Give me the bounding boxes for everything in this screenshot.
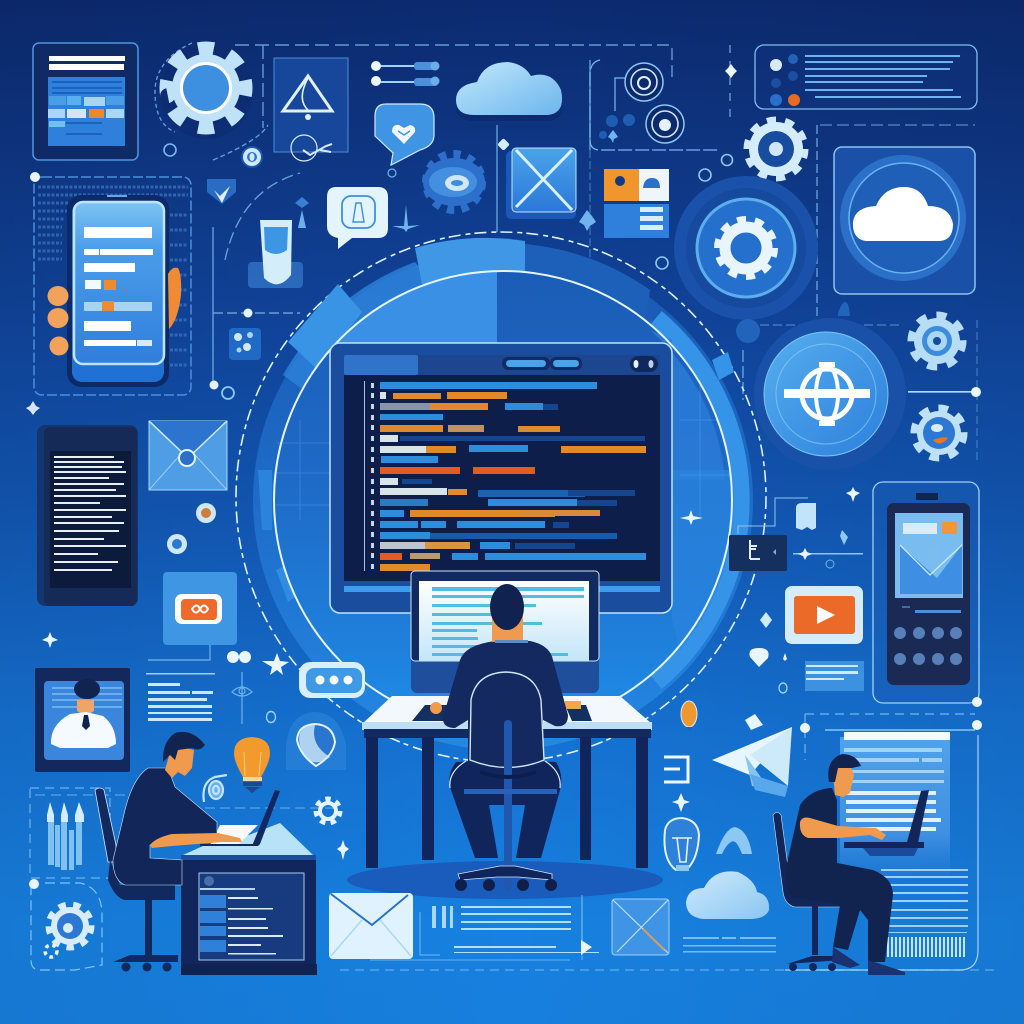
panel: dark tag box: [729, 498, 816, 571]
icon: chat bubble: [299, 662, 365, 698]
code lines: [364, 381, 646, 571]
diamond marker: [497, 138, 510, 151]
laptop right: [844, 790, 929, 856]
icon: twin dots and star: [227, 651, 289, 675]
window controls: [502, 356, 658, 372]
dashed orbit: [236, 232, 766, 762]
text block: left text lines: [146, 673, 215, 721]
desk: [362, 696, 652, 868]
person at desk, back view: [347, 571, 663, 899]
icon: coin balloon: [681, 701, 697, 731]
panel: pens chart: [30, 788, 110, 878]
text block: bottom lines with play: [420, 895, 599, 955]
icon: sliders: [371, 61, 440, 86]
icon: dotted square: [229, 328, 261, 360]
sparkles and small marks middle right: [680, 487, 863, 628]
side desk: [181, 823, 317, 975]
icon: gear in rings: [674, 176, 818, 320]
arm: [800, 818, 886, 840]
icon: outlined bulb: [664, 793, 699, 871]
outer halo: [253, 250, 753, 750]
icon: bracket glyph: [664, 757, 688, 782]
code screen: [344, 375, 660, 581]
icon: light bulb orange: [234, 737, 270, 793]
bubble disc: [736, 302, 850, 343]
icon: globe orb: [754, 318, 906, 470]
torso and arm: [113, 768, 242, 885]
patterned backing: [30, 172, 191, 395]
panel: gear card bottom left: [29, 879, 102, 970]
icon: eye and pointers: [232, 672, 276, 724]
panel: right document workspace: [773, 697, 982, 975]
icon: small rings near gear: [164, 144, 263, 168]
panel: top-left tablet: [33, 43, 138, 160]
icon: shield speech bubble: [327, 187, 388, 249]
icon: mini gear: [316, 799, 340, 823]
icon: water flask: [248, 197, 309, 288]
panel: profile portrait: [35, 668, 130, 772]
panel: twin dials: [590, 60, 718, 150]
laptop: [200, 790, 280, 846]
sparkles edges: [26, 64, 737, 860]
torso: [443, 641, 568, 765]
phone content: [84, 227, 153, 346]
icon: heart speech bubble: [375, 104, 434, 177]
panel: orange and blue layout card: [604, 169, 669, 238]
desk screen: [199, 873, 304, 960]
icon: arch shape: [716, 827, 752, 854]
radial segments: [258, 238, 741, 682]
monitor bezel: [330, 343, 672, 613]
code monitor: [330, 343, 672, 613]
panel: right phone: [873, 482, 979, 703]
panel: status list: [755, 45, 977, 109]
central radial dial: [236, 232, 766, 762]
icon: cloud lower: [686, 871, 769, 919]
frame: [785, 697, 982, 970]
icon: spiral mark: [203, 775, 227, 802]
icon: shield heart: [207, 179, 236, 204]
head side: [163, 732, 205, 778]
phone body: [67, 195, 169, 387]
inner disc: [274, 271, 734, 729]
barcode: [887, 937, 966, 957]
chair: [450, 672, 560, 891]
solid ring: [274, 271, 732, 729]
keyboards: [412, 701, 592, 721]
panel: cloud tile: [834, 147, 975, 294]
panel: warning triangle: [274, 58, 348, 161]
seated body: [786, 788, 905, 975]
neck and head: [490, 584, 528, 643]
sparkle cross: [392, 205, 420, 232]
connector node left: [210, 308, 252, 399]
icon: video play: [785, 586, 863, 644]
bars block: [881, 869, 968, 933]
small monitor: [411, 571, 599, 693]
icon: envelope tile bottom: [612, 899, 669, 955]
side chair right: [773, 812, 842, 971]
person with laptop left: [95, 732, 317, 975]
side chair: [95, 788, 178, 972]
icon: mail envelope bottom: [329, 893, 413, 959]
legs: [449, 760, 561, 858]
small rings left: [167, 503, 216, 554]
icon: pin drop and mini card: [749, 648, 864, 693]
connector node right: [908, 387, 981, 397]
icon: gear right 1: [912, 316, 962, 366]
head right: [828, 754, 861, 797]
icon: glowing eye blob: [423, 156, 485, 208]
text block: lines under cloud: [683, 937, 776, 952]
fingers: [48, 268, 181, 356]
document: [840, 732, 950, 877]
panel: left dark phone: [37, 425, 138, 606]
icon: envelope tile top: [506, 148, 576, 219]
icon: shield pin: [286, 712, 346, 770]
icon: envelope tile left: [149, 421, 227, 490]
floor shadow: [347, 861, 663, 899]
icon: gear upper right: [748, 121, 804, 177]
icon: infinity tile: [163, 572, 237, 645]
rings: [656, 154, 732, 269]
panel: phone in hand: [30, 172, 191, 395]
icon: paper plane: [712, 714, 792, 797]
icon: large gear: [160, 42, 252, 139]
icon: gear right 2: [915, 409, 963, 457]
icon: cloud top: [456, 62, 563, 121]
